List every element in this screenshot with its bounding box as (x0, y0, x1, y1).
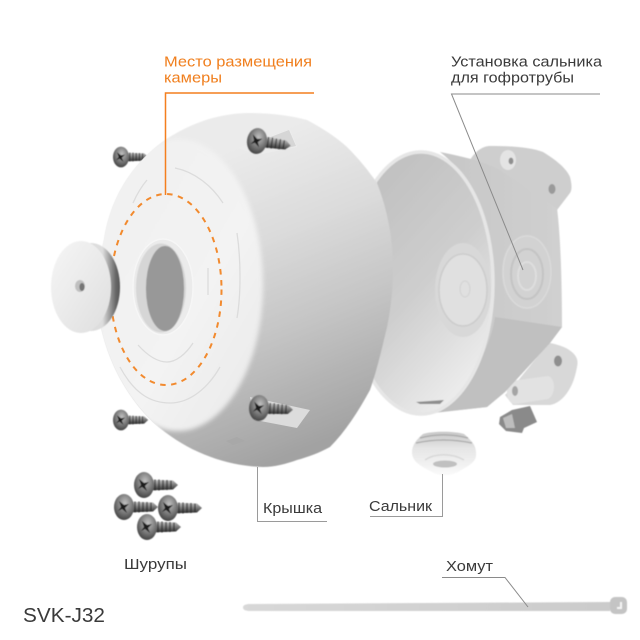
inside of the box (349, 152, 493, 414)
cover (93, 113, 393, 467)
hole interior (146, 246, 184, 331)
callout: gland mounting: Установка сальника (451, 54, 603, 70)
fastening clip (499, 406, 537, 433)
callout: camera placement: камеры (164, 70, 222, 86)
callout: camera placement: Место размещения (164, 54, 312, 70)
plug disc (51, 241, 120, 333)
label: screws: Шурупы (124, 557, 187, 573)
screw slot: bottom (250, 397, 310, 428)
ear boss and holes (500, 150, 516, 170)
mounting ear: bottom right (505, 343, 578, 405)
camera placement dashed outline (110, 194, 222, 385)
callout: gland mounting (451, 54, 603, 270)
callout: gland mounting: для гофротрубы (451, 70, 574, 86)
callout: gland (369, 474, 442, 516)
callout: cover (258, 467, 327, 522)
vent mark (226, 437, 245, 445)
internal slot (416, 400, 444, 404)
face relief rings (120, 168, 240, 403)
hole rim (133, 239, 193, 335)
box side wall (425, 152, 562, 414)
mounting ear: top right (470, 146, 572, 210)
callout: cable tie (442, 559, 528, 607)
cover front face (93, 139, 263, 431)
screw: lower left behind cover (113, 410, 148, 430)
junction box base (349, 146, 578, 433)
loose screws group (114, 472, 202, 540)
screw: top (245, 127, 292, 159)
hole wall (136, 244, 186, 332)
knockout: outer wall (503, 236, 551, 308)
screw slot: top (238, 129, 297, 155)
cover body (97, 113, 393, 467)
cable gland (412, 432, 476, 475)
callout: cable tie: Хомут (446, 559, 493, 575)
cable tie (243, 597, 627, 614)
callout: gland: Сальник (369, 499, 433, 515)
callout: cover: Крышка (263, 501, 323, 517)
callout: camera placement (164, 54, 314, 195)
screw: bottom (248, 394, 294, 423)
screw: upper left behind cover (113, 147, 148, 167)
model name: SVK-J32 (23, 605, 105, 627)
knockout: inner wall (435, 243, 491, 337)
